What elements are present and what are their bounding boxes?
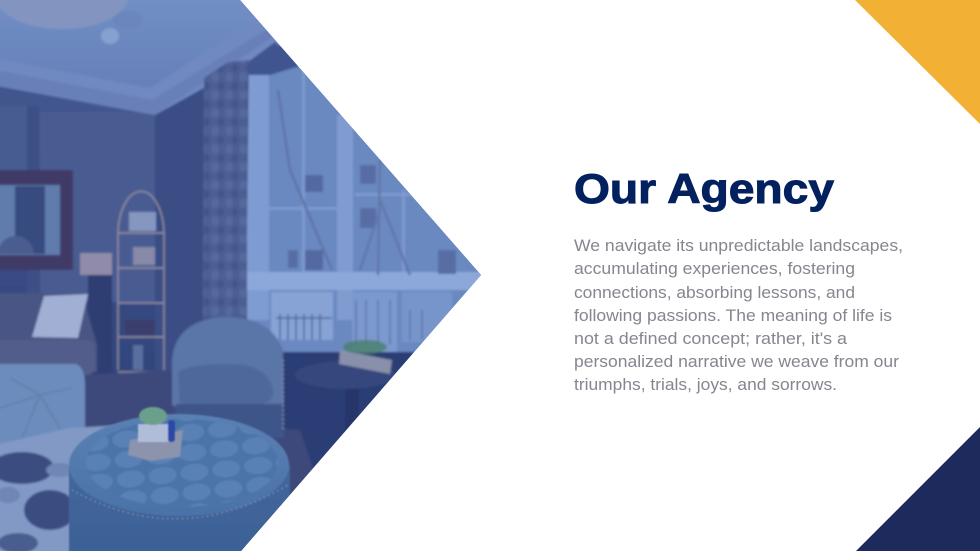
body paragraph [574,236,903,394]
mirror [0,170,73,270]
body paragraph: We navigate its unpredictable landscapes, [574,236,903,255]
body paragraph: following passions. The meaning of life is [574,306,892,325]
back wall [0,88,160,400]
body paragraph: triumphs, trials, joys, and sorrows. [574,375,837,394]
photo: living room with blue tint in arrow shape [0,0,495,551]
etagere shelf [118,191,164,372]
rug [0,425,125,551]
window [246,66,481,354]
tufted bench [0,364,85,445]
side table with planter [296,339,394,430]
side wall [156,203,166,370]
ceiling [0,0,257,89]
tray with plant [128,407,183,461]
sofa [0,293,97,378]
floor [86,370,313,551]
yellow corner triangle [855,0,980,124]
lamp shade [80,253,112,275]
curtain [203,60,249,320]
title: Our Agency [574,165,835,212]
navy corner triangle [856,427,980,551]
crown moulding [0,36,280,113]
armchair [172,317,284,438]
body paragraph: personalized narrative we weave from our [574,352,899,371]
body paragraph: not a defined concept; rather, it's a [574,329,848,348]
body paragraph: accumulating experiences, fostering [574,259,855,278]
body paragraph: connections, absorbing lessons, and [574,283,855,302]
round tufted ottoman [69,414,290,551]
dark lower wall [282,350,414,469]
